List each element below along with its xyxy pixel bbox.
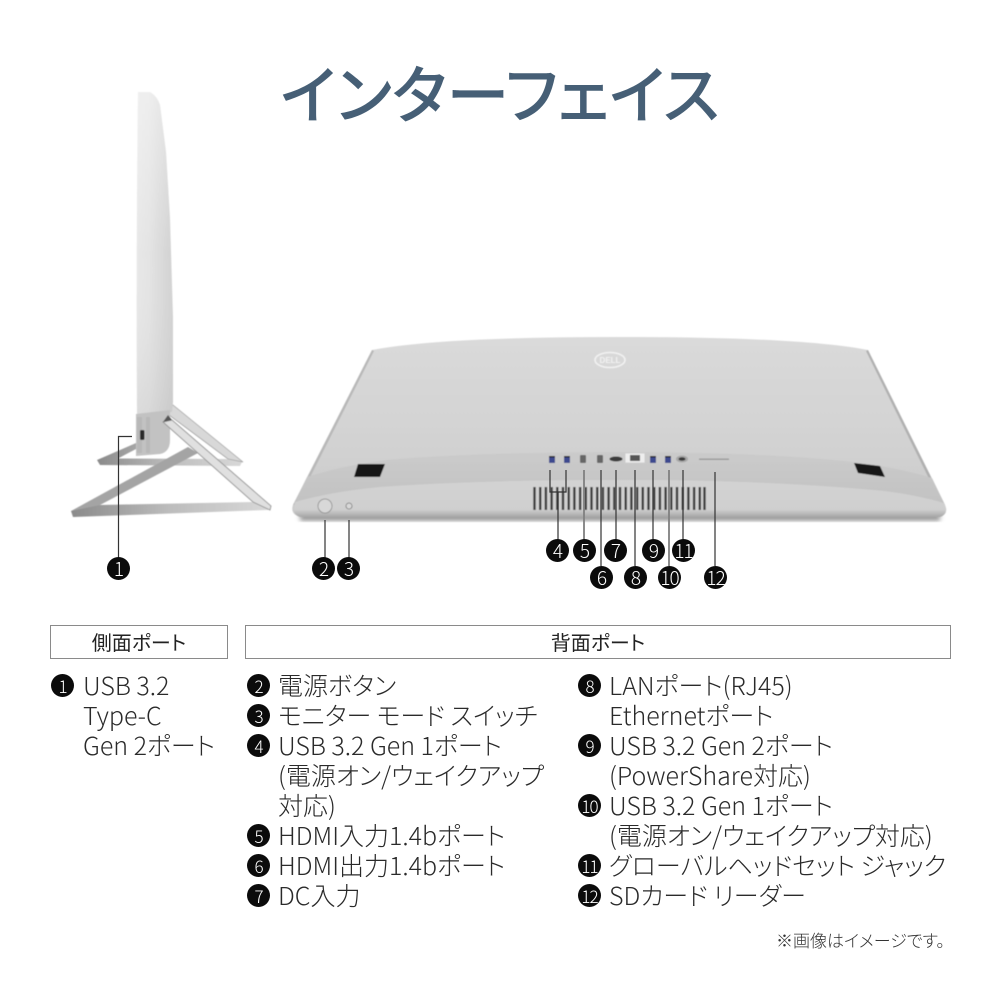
callout number 2 bbox=[312, 557, 335, 580]
callout number 9: 9 bbox=[649, 537, 658, 564]
list: side ports: 1 bbox=[58, 673, 67, 698]
product illustrations bbox=[70, 92, 947, 566]
list: rear ports column 2: 9 bbox=[585, 733, 594, 758]
list: rear ports column 1: DC入力 bbox=[278, 877, 360, 913]
rear vent slots bbox=[534, 487, 704, 510]
callout number 6 bbox=[590, 566, 613, 589]
leader lines bbox=[118, 436, 715, 566]
callout number 3: 3 bbox=[344, 555, 353, 582]
list: rear ports column 1: HDMI出力1.4bポート bbox=[278, 847, 505, 883]
right vent bbox=[854, 463, 885, 477]
list: side ports: Type-C bbox=[83, 697, 162, 733]
callout number 11: 11 bbox=[674, 537, 693, 564]
list: rear ports column 2: (PowerShare対応) bbox=[609, 757, 811, 793]
callout number 4: 4 bbox=[553, 537, 562, 564]
footnote: ※画像はイメージです。 bbox=[776, 927, 945, 952]
callout number 3 bbox=[337, 557, 360, 580]
list: rear ports column 1 bbox=[247, 667, 544, 913]
callout number 2: 2 bbox=[319, 555, 328, 582]
list: rear ports column 1: 4 bbox=[254, 733, 263, 758]
list: rear ports column 2: (電源オン/ウェイクアップ対応) bbox=[609, 817, 933, 853]
list: rear ports column 2: 10 bbox=[581, 793, 598, 818]
lower lip bbox=[294, 480, 946, 517]
heading: side ports: 側面ポート bbox=[92, 627, 186, 656]
list: rear ports column 1: HDMI入力1.4bポート bbox=[278, 817, 505, 853]
monitor base with side port bbox=[136, 410, 170, 456]
callout number 10: 10 bbox=[660, 564, 679, 591]
back stand leg bbox=[97, 405, 243, 466]
callout number 7 bbox=[604, 539, 627, 562]
callout number 8 bbox=[624, 566, 647, 589]
callout number 5 bbox=[573, 539, 596, 562]
list: rear ports column 2: SDカード リーダー bbox=[609, 877, 806, 913]
list: rear ports column 1: (電源オン/ウェイクアップ bbox=[278, 757, 544, 793]
list: rear ports column 2: 8 bbox=[585, 673, 594, 698]
heading: rear ports: 背面ポート bbox=[551, 627, 645, 656]
callout number 4 bbox=[546, 539, 569, 562]
list: rear ports column 2: USB 3.2 Gen 2ポート bbox=[609, 727, 833, 763]
heading: rear ports bbox=[245, 625, 951, 659]
monitor mode switch bbox=[346, 503, 352, 509]
callout number 12: 12 bbox=[706, 564, 725, 591]
callout number 1 bbox=[107, 557, 130, 580]
list: rear ports column 1: モニター モード スイッチ bbox=[278, 697, 538, 733]
list: rear ports column 2: 12 bbox=[581, 883, 598, 908]
list: rear ports column 1: 3 bbox=[254, 703, 263, 728]
list: rear ports column 1: 対応) bbox=[278, 787, 336, 823]
list: rear ports column 2: グローバルヘッドセット ジャック bbox=[609, 847, 946, 883]
title: インターフェイス bbox=[280, 46, 720, 137]
textured ledge bbox=[295, 452, 944, 503]
list: rear ports column 2: USB 3.2 Gen 1ポート bbox=[609, 787, 833, 823]
rear view: monitor back bbox=[292, 337, 946, 521]
list: rear ports column 2 bbox=[578, 667, 946, 913]
list: rear ports column 2: Ethernetポート bbox=[609, 697, 773, 733]
list: rear ports column 1: 5 bbox=[254, 823, 263, 848]
callout number 5: 5 bbox=[580, 537, 589, 564]
Dell logo: DELL bbox=[600, 356, 621, 365]
list: rear ports column 1: 6 bbox=[254, 853, 263, 878]
list: side ports: Gen 2ポート bbox=[83, 727, 215, 763]
callout number 8: 8 bbox=[631, 564, 640, 591]
callout number 1: 1 bbox=[114, 555, 123, 582]
side view: monitor and stand bbox=[71, 92, 271, 517]
list: rear ports column 1: 電源ボタン bbox=[278, 667, 396, 703]
heading: side ports bbox=[50, 625, 228, 659]
list: rear ports column 1: USB 3.2 Gen 1ポート bbox=[278, 727, 502, 763]
rear ports bbox=[549, 453, 729, 463]
callout number 9 bbox=[642, 539, 665, 562]
list: side ports bbox=[51, 667, 215, 763]
callout number 7: 7 bbox=[611, 537, 620, 564]
left vent bbox=[354, 464, 385, 477]
front stand leg bbox=[71, 415, 271, 517]
list: rear ports column 1: 2 bbox=[254, 673, 263, 698]
power button bbox=[318, 499, 332, 513]
list: rear ports column 2: 11 bbox=[581, 853, 598, 878]
list: side ports: USB 3.2 bbox=[83, 667, 169, 703]
list: rear ports column 1: 7 bbox=[254, 883, 263, 908]
monitor side profile bbox=[137, 92, 173, 414]
callout number 6: 6 bbox=[597, 564, 606, 591]
list: rear ports column 2: LANポート(RJ45) bbox=[609, 667, 793, 703]
rear panel bbox=[292, 337, 946, 517]
Dell logo bbox=[595, 352, 625, 368]
